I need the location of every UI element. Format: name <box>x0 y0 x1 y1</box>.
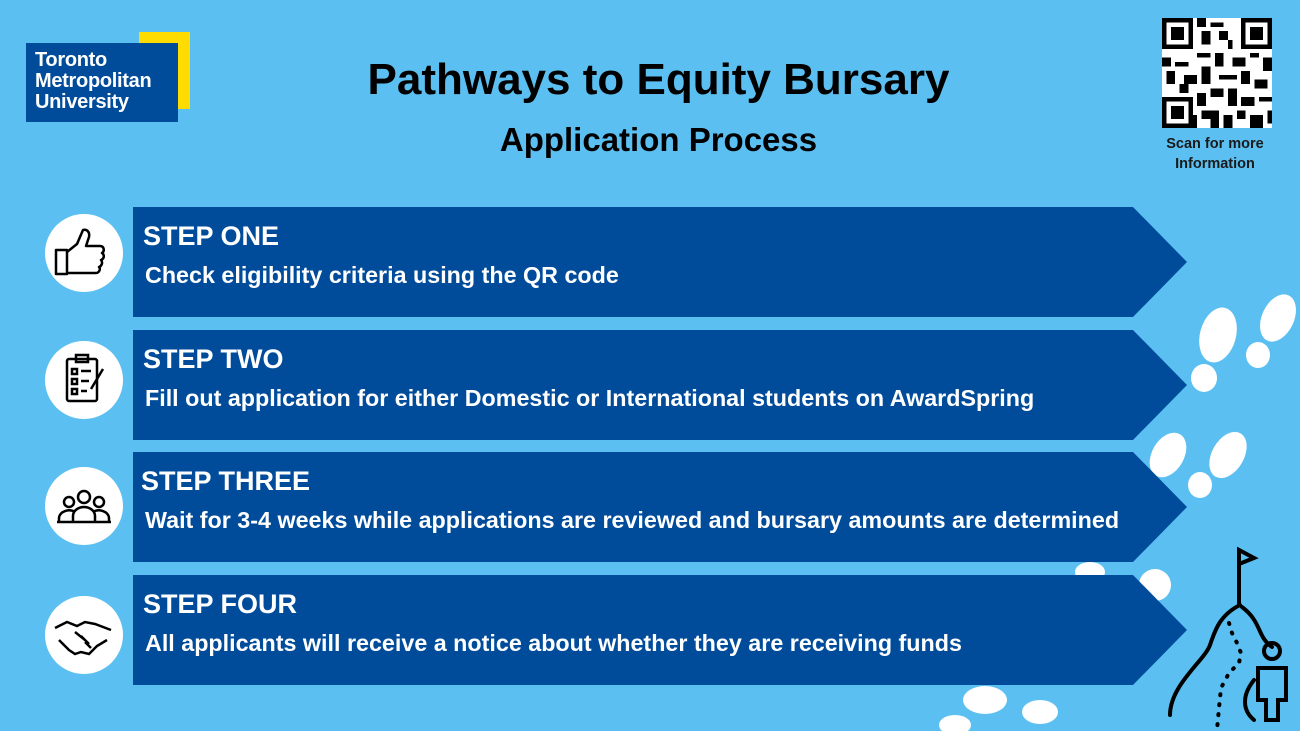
step one <box>133 207 1187 317</box>
logo <box>26 32 190 122</box>
QR code <box>1162 18 1272 128</box>
logo: University <box>35 91 129 113</box>
QR caption: Scan for more <box>1166 136 1264 152</box>
step four: STEP FOUR <box>143 589 297 619</box>
step two: Fill out application for either Domestic or International students on AwardSpring <box>145 385 1034 411</box>
step three <box>133 452 1187 562</box>
step three: STEP THREE <box>141 466 310 496</box>
QR caption: Information <box>1175 156 1255 172</box>
subtitle: Application Process <box>500 121 817 158</box>
icon: group of people <box>45 467 123 545</box>
step three: Wait for 3-4 weeks while applications are reviewed and bursary amounts are determined <box>145 507 1119 533</box>
icon: handshake <box>45 596 123 674</box>
icon: thumbs up <box>45 214 123 292</box>
title: Pathways to Equity Bursary <box>368 55 949 104</box>
step two <box>133 330 1187 440</box>
icon: path to flag with person <box>1168 546 1288 728</box>
logo: Toronto <box>35 49 107 71</box>
step four: All applicants will receive a notice about whether they are receiving funds <box>145 630 962 656</box>
logo: Metropolitan <box>35 70 151 92</box>
QR caption <box>1166 136 1264 172</box>
icon: clipboard <box>45 341 123 419</box>
step two: STEP TWO <box>143 344 284 374</box>
step four <box>133 575 1187 685</box>
step one: STEP ONE <box>143 221 279 251</box>
step one: Check eligibility criteria using the QR code <box>145 262 619 288</box>
